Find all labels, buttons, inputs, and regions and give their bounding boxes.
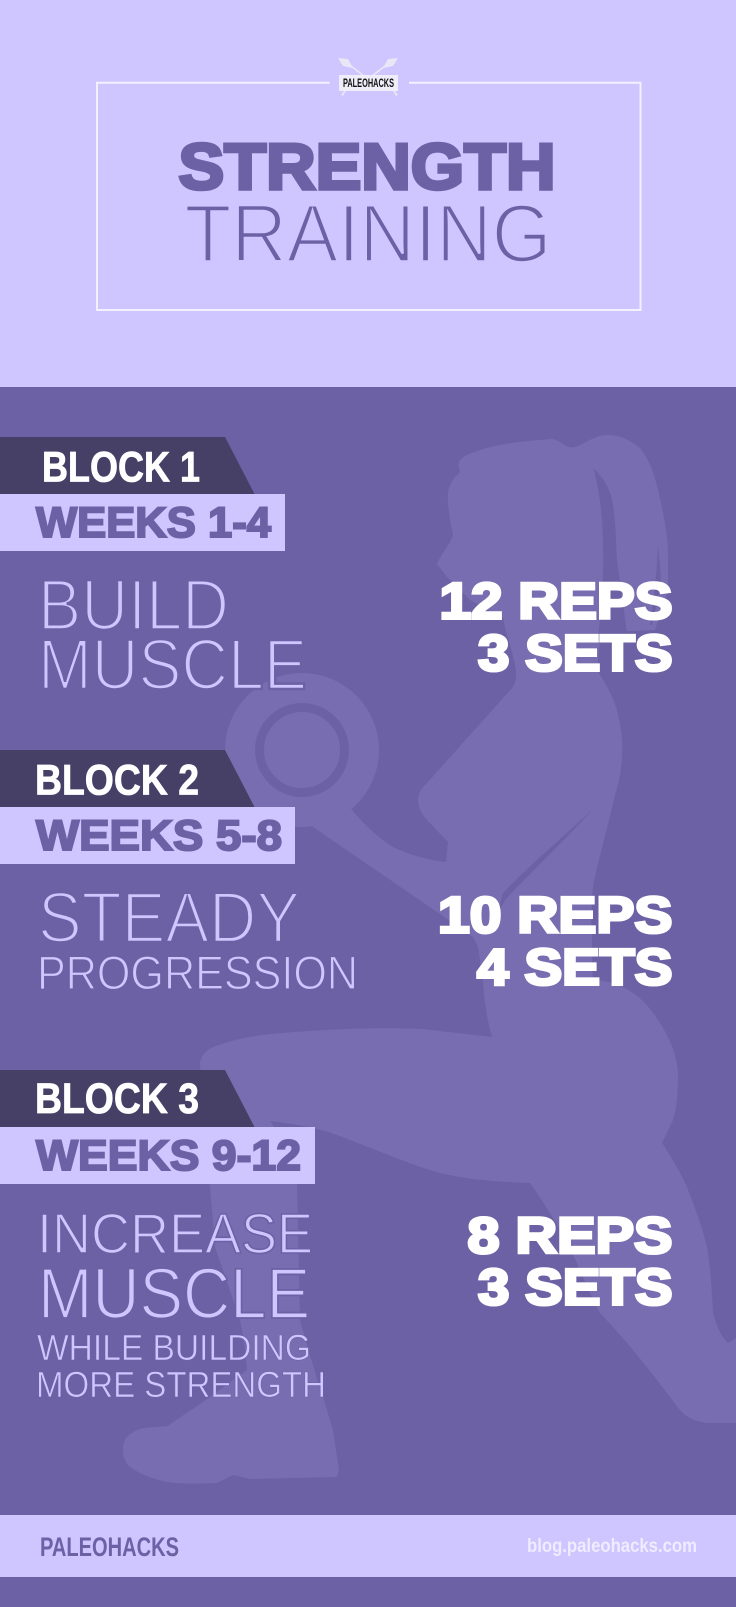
goal: increase muscle while building more strength: WHILE BUILDING (37, 1327, 311, 1368)
weeks 9-12 label: WEEKS 9-12 (36, 1132, 301, 1180)
goal: increase muscle while building more strength: MUSCLE (38, 1255, 310, 1334)
reps and sets (440, 572, 672, 682)
reps and sets: 4 SETS (477, 938, 672, 996)
goal: increase muscle while building more strength (36, 1202, 326, 1405)
title: strength: STRENGTH (178, 130, 556, 203)
reps and sets: 3 SETS (478, 624, 672, 682)
block 2 label: BLOCK 2 (35, 756, 199, 804)
silhouette: woman lunging with dumbbell (123, 435, 736, 1484)
reps and sets: 12 REPS (440, 572, 672, 630)
panel: block 3 (0, 1070, 672, 1405)
reps and sets: 10 REPS (438, 886, 672, 944)
weeks 5-8 bar (0, 807, 295, 864)
footer bar (0, 1515, 736, 1577)
goal: increase muscle while building more strength: INCREASE (37, 1202, 313, 1266)
goal: increase muscle while building more strength: MORE STRENGTH (36, 1364, 326, 1405)
reps and sets: 8 REPS (468, 1207, 672, 1264)
block 3 label: BLOCK 3 (35, 1075, 199, 1123)
panel: block 1 (0, 437, 672, 705)
reps and sets: 3 SETS (478, 1258, 672, 1316)
reps and sets (468, 1207, 672, 1316)
goal: build muscle: MUSCLE (38, 626, 307, 705)
header panel (0, 0, 736, 387)
title frame (97, 83, 640, 310)
goal: steady progression (37, 879, 358, 999)
weeks 9-12 bar (0, 1127, 315, 1184)
weeks 5-8 label: WEEKS 5-8 (36, 812, 282, 860)
weeks 1-4 label: WEEKS 1-4 (36, 499, 271, 547)
icon: paleohacks logo (338, 58, 398, 96)
block 1 tag (0, 437, 254, 494)
footer url: blog.paleohacks.com (527, 1536, 697, 1557)
title: training: TRAINING (184, 188, 552, 280)
panel: block 2 (0, 750, 672, 999)
icon: paleohacks logo: PALEOHACKS (343, 77, 394, 90)
goal: steady progression: PROGRESSION (37, 946, 358, 999)
reps and sets (438, 886, 672, 996)
goal: build muscle: BUILD (38, 566, 229, 646)
block 2 tag (0, 750, 254, 807)
goal: build muscle (38, 566, 307, 705)
block 1 label: BLOCK 1 (42, 444, 200, 492)
weeks 1-4 bar (0, 494, 285, 551)
goal: steady progression: STEADY (38, 879, 300, 958)
footer brand: PALEOHACKS (40, 1532, 179, 1562)
block 3 tag (0, 1070, 254, 1127)
